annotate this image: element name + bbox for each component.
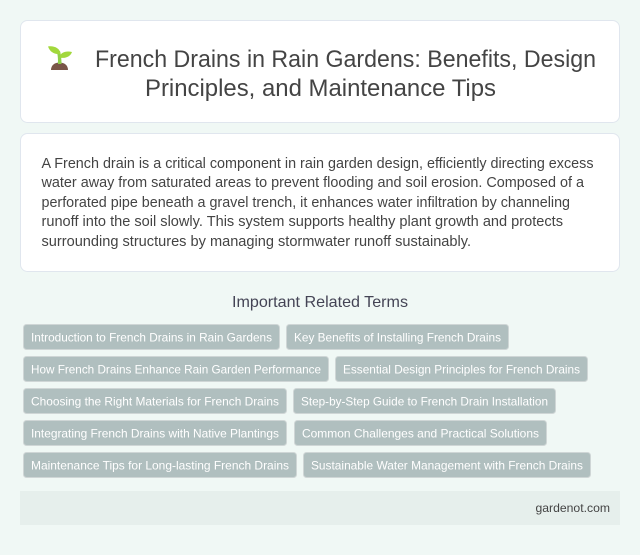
tag [24,420,286,446]
tag [286,324,508,350]
title: Principles, and Maintenance Tips [145,75,496,102]
tag [294,420,546,446]
tag: Step-by-Step Guide to French Drain Installation [301,394,548,408]
heading: related terms: Important Related Terms [232,294,408,311]
tag [336,356,588,382]
tag: Choosing the Right Materials for French Drains [31,394,279,408]
tag: Key Benefits of Installing French Drains [294,330,501,344]
tag [304,452,590,478]
tag [24,356,328,382]
tag: Introduction to French Drains in Rain Gardens [31,330,272,344]
tag [24,324,280,350]
tag: How French Drains Enhance Rain Garden Performance [31,362,321,376]
footer [20,491,620,525]
text block: description: perforated pipe beneath a gravel trench, it enhances water infiltration by channeling [42,195,570,211]
text block: description: surrounding structures by managing stormwater runoff sustainably. [42,234,471,250]
text block: description: runoff into the soil slowly. This system supports healthy plant growth and protects [42,214,563,230]
tag: Integrating French Drains with Native Plantings [31,426,279,440]
footer source: gardenot.com [536,501,610,515]
tag [294,388,556,414]
tag: Essential Design Principles for French Drains [343,362,580,376]
text block: description: water away from saturated areas to prevent flooding and soil erosion. Composed of a [40,175,584,191]
panel: description [20,134,620,272]
icon: seedling [48,46,72,70]
tag [24,452,296,478]
panel: title header [20,20,620,122]
title: French Drains in Rain Gardens: Benefits, Design [95,46,596,73]
tag [24,388,286,414]
tag: Sustainable Water Management with French Drains [311,458,583,472]
text block: description: A French drain is a critical component in rain garden design, efficiently directing excess [42,156,594,172]
tag: Maintenance Tips for Long-lasting French Drains [31,458,289,472]
tag: Common Challenges and Practical Solutions [302,426,539,440]
panel: related term tags [24,324,590,478]
